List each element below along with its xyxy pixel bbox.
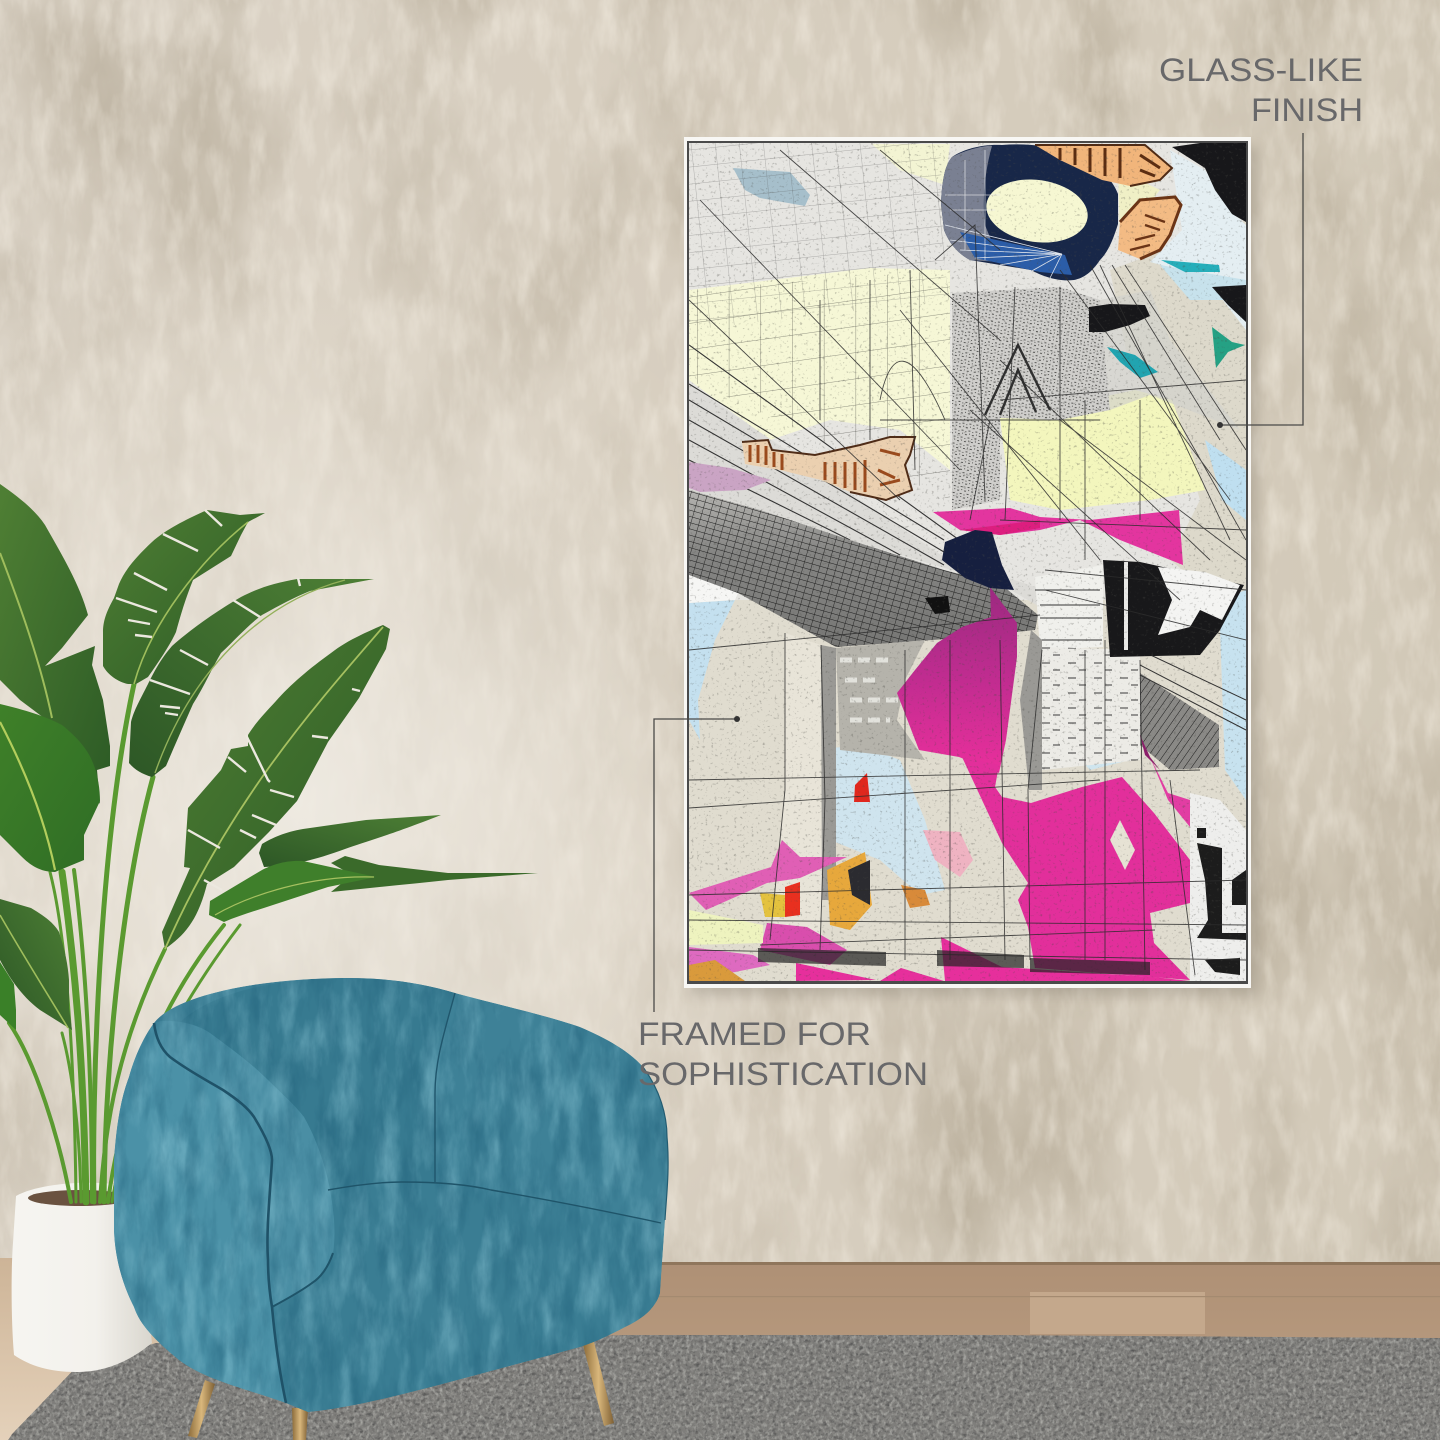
pink lower left washes (689, 840, 847, 910)
chair piping (154, 1023, 286, 1403)
leaf: left middle (0, 704, 100, 872)
chair arm outer (114, 1023, 286, 1403)
orange butterfly shapes (1035, 145, 1172, 186)
leaf: lower stacked far (331, 856, 538, 892)
leaf: large right (162, 625, 390, 949)
bottom hatched footing (758, 948, 1150, 975)
leaf: upper left (0, 484, 110, 804)
pier three bricks (1042, 647, 1140, 770)
leaf: lower stacked mid (259, 815, 441, 867)
white frame (684, 137, 1251, 988)
callout: glass-like finish: FINISH (1251, 92, 1363, 128)
callout: framed for sophistication (638, 716, 928, 1092)
wood floor (0, 1258, 1440, 1440)
deck white highlights at right (1035, 565, 1103, 650)
armchair (114, 978, 668, 1440)
chair body (114, 978, 668, 1412)
chair upholstery (114, 978, 668, 1412)
orange wing on deck (742, 437, 915, 500)
chair inner back left (179, 978, 455, 1190)
pier one (772, 634, 822, 934)
leaf: mid right (129, 579, 374, 777)
black and white poster (1103, 560, 1244, 657)
framed artwork (684, 137, 1258, 996)
plant pot (12, 1183, 152, 1372)
callout: framed for sophistication: FRAMED FOR (638, 1016, 871, 1052)
tower arch lines (985, 345, 1050, 415)
light blue scraps (733, 168, 810, 206)
upper left perspective grid (689, 143, 950, 330)
pier two with grey columns (821, 645, 836, 900)
tan torn paper right (1110, 220, 1246, 620)
artwork canvas (689, 143, 1246, 981)
speckle texture (689, 143, 1246, 981)
dark blue hand (942, 530, 1014, 590)
architectural line drawing (689, 150, 1246, 975)
white torn column right (1190, 793, 1246, 981)
leaf: lower stacked near (209, 861, 376, 922)
blue ring (941, 144, 1118, 280)
tower top (952, 287, 1110, 510)
chair arm inner (154, 1021, 334, 1307)
pale yellow patches (689, 268, 950, 470)
leaf: lower left (0, 899, 72, 1030)
chair legs (188, 1380, 215, 1438)
roadway deck (689, 490, 1038, 647)
leaf: top centre (103, 510, 265, 684)
magenta paint main (897, 587, 1017, 773)
callout: glass-like finish (1159, 52, 1363, 428)
plant stems (9, 684, 240, 1202)
callout: framed for sophistication: SOPHISTICATION (638, 1056, 928, 1092)
collage face (760, 893, 785, 917)
chair seat cushion (272, 1182, 661, 1412)
plant leaves (0, 484, 538, 1030)
railing band (689, 384, 1045, 610)
yellow green bottom patch (689, 910, 763, 945)
pale pink deck edge (689, 462, 771, 492)
rug (8, 1335, 1440, 1440)
callout: glass-like finish: GLASS-LIKE (1159, 52, 1363, 88)
hatched grey bridge right (1140, 673, 1219, 770)
